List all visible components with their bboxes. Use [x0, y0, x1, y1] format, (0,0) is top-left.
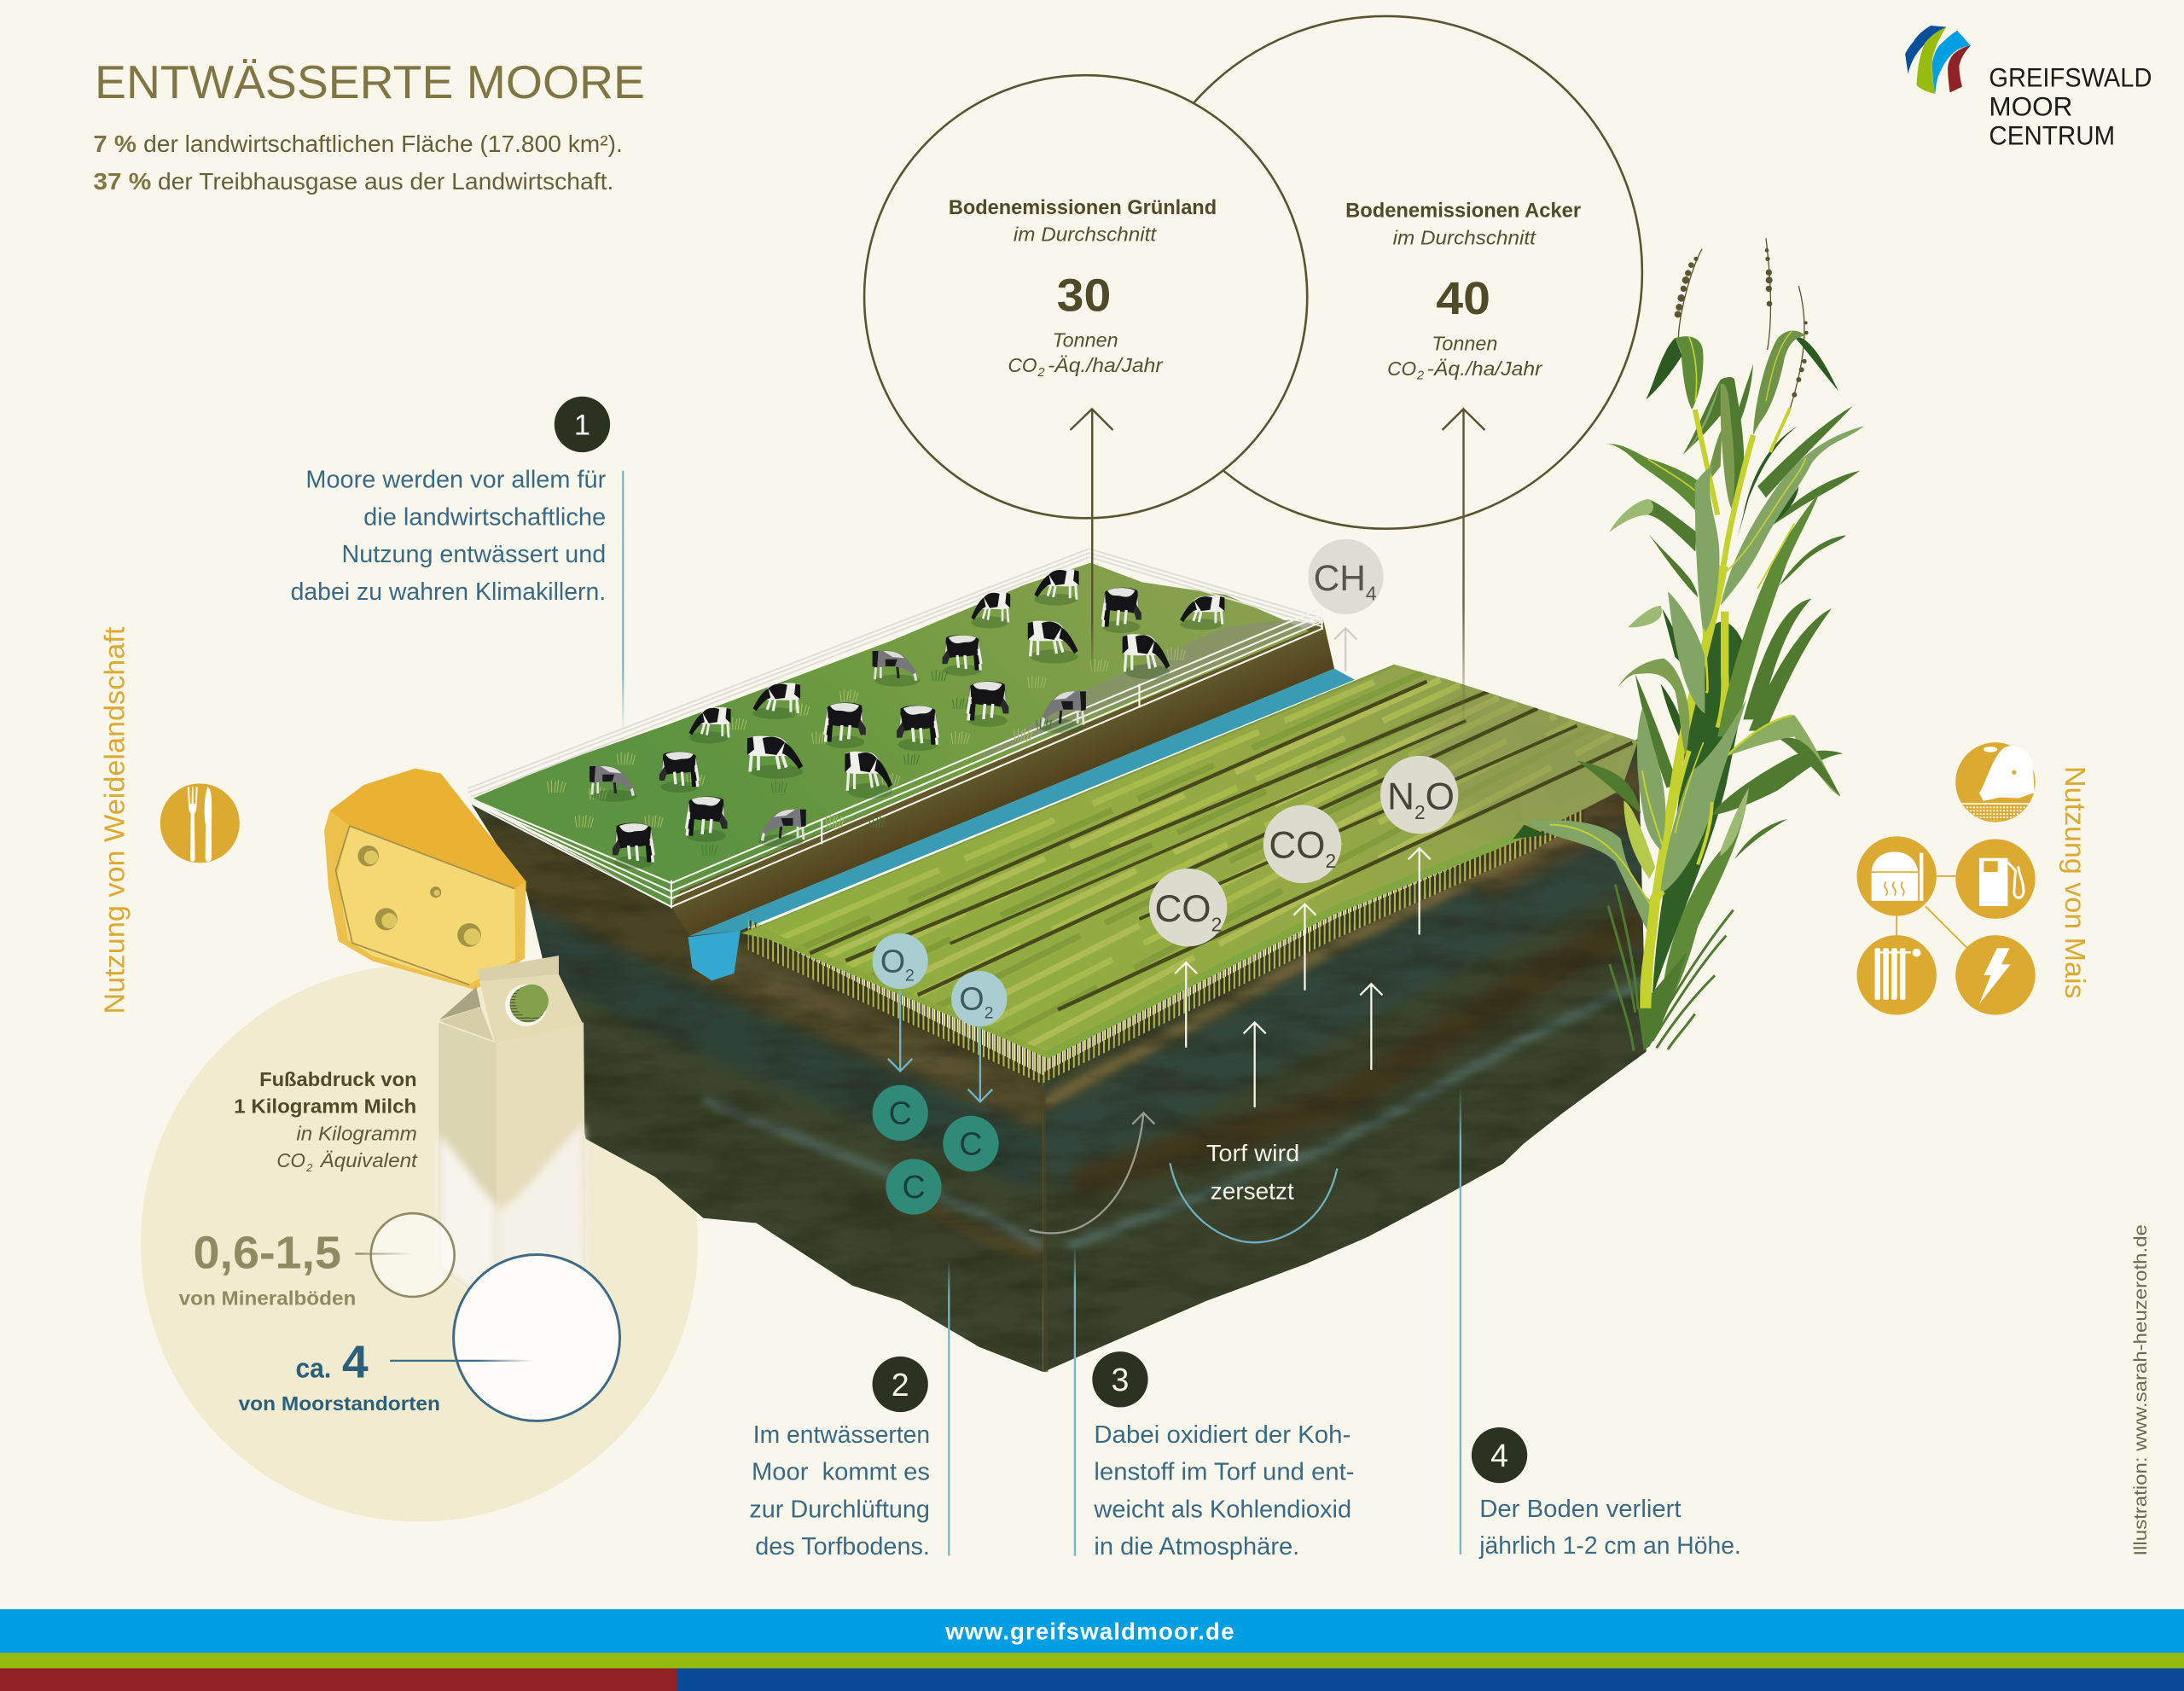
circle: Bodenemissionen Acker: im Durchschnitt: [1393, 227, 1537, 249]
circle: Bodenemissionen Grünland: 2: [1037, 366, 1044, 380]
lower leaves: [1618, 659, 1689, 757]
circle: Bodenemissionen Acker: Bodenemissionen Acker: [1345, 200, 1581, 223]
illustration: soil block: [460, 620, 1658, 1379]
icon: fuel pump: [1955, 839, 2036, 919]
step 1: die landwirtschaftliche: [363, 503, 606, 531]
intro text: [93, 131, 623, 195]
side label: Nutzung von Mais: Nutzung von Mais: [2059, 766, 2090, 999]
milk carton: [439, 956, 586, 1310]
value: mineral soils: 0,6-1,5: [194, 1227, 341, 1278]
step 2: 2: [892, 1367, 909, 1403]
gas: CO2: 2: [1325, 850, 1336, 872]
label: Torf wird zersetzt: Torf wird: [1206, 1140, 1299, 1166]
circle: Bodenemissionen Grünland: im Durchschnitt: [1014, 223, 1158, 245]
carbon particles: C: [902, 1169, 926, 1205]
gas: O2: [873, 933, 928, 1071]
step 1: 1: [574, 409, 590, 441]
seed heads: [1675, 238, 1809, 408]
circle: Bodenemissionen Grünland: CO: [1008, 354, 1037, 376]
main leaves: [1646, 338, 1682, 399]
illustration: crop field: [731, 654, 1651, 1084]
illustration: pasture: [468, 549, 1323, 908]
footprint circle background: [141, 965, 698, 1522]
cheese: [324, 769, 526, 990]
gas: CH4: CH: [1314, 558, 1366, 598]
step 2: [749, 1261, 950, 1560]
gas: CO2: [1263, 805, 1341, 883]
gas: O2: 2: [905, 966, 915, 985]
step 2: zur Durchlüftung: [749, 1496, 930, 1524]
step 3: weicht als Kohlendioxid: [1093, 1496, 1351, 1524]
step 4: 4: [1490, 1438, 1508, 1473]
step 1: Nutzung entwässert und: [341, 541, 606, 568]
footprint text: 1 Kilogramm Milch: [234, 1095, 416, 1117]
logo: Greifswald Moor Centrum: GREIFSWALD: [1989, 62, 2152, 93]
base with grass blades: [1638, 953, 1687, 1050]
icon: fork and knife: [160, 783, 240, 863]
footprint text: in Kilogramm: [296, 1123, 417, 1145]
icon: biogas plant: [1856, 836, 1937, 916]
value: mineral soils: [179, 1213, 455, 1310]
footer band: www.greifswaldmoor.de: [944, 1618, 1234, 1644]
carbon particles: [873, 1085, 999, 1215]
step 1: [291, 397, 624, 735]
value: peat sites: [239, 1255, 620, 1421]
circle: Bodenemissionen Grünland: -Äq./ha/Jahr: [1048, 354, 1164, 376]
circle: Bodenemissionen Acker: [1130, 16, 1642, 529]
gas: CO2: 2: [1211, 913, 1222, 935]
gas: N2O: N: [1387, 776, 1414, 818]
footprint text: 2: [305, 1161, 313, 1174]
footprint text: [234, 1068, 419, 1174]
circle: Bodenemissionen Acker: 40: [1436, 273, 1490, 324]
stem: [1647, 408, 1790, 1008]
circle: Bodenemissionen Grünland: [864, 75, 1307, 518]
side label: Nutzung von Weidelandschaft: Nutzung von Weidelandschaft: [99, 626, 131, 1014]
emission arrow: pasture: [1071, 409, 1112, 671]
label: Torf wird zersetzt: zersetzt: [1211, 1178, 1294, 1205]
icon: radiator: [1856, 935, 1937, 1015]
circle: Bodenemissionen Acker: -Äq./ha/Jahr: [1427, 357, 1543, 380]
intro text: 7 %: [93, 131, 136, 157]
step 1: dabei zu wahren Klimakillern.: [291, 578, 606, 606]
emission arrow: field: [1443, 409, 1484, 734]
step 1: Moore werden vor allem für: [305, 466, 607, 493]
step 3: lenstoff im Torf und ent-: [1094, 1458, 1355, 1485]
cows: [590, 569, 1224, 869]
gas: O2: [951, 971, 1007, 1101]
step 4: jährlich 1-2 cm an Höhe.: [1478, 1532, 1741, 1560]
logo: Greifswald Moor Centrum: CENTRUM: [1989, 119, 2115, 150]
footer band: [0, 1609, 2184, 1691]
step 3: 3: [1112, 1362, 1129, 1398]
circle: Bodenemissionen Grünland: 30: [1057, 270, 1111, 322]
gas: N2O: [1380, 756, 1458, 834]
intro text: 37 %: [93, 168, 151, 195]
intro text: der landwirtschaftlichen Fläche (17.800 km²).: [143, 131, 623, 157]
footprint text: CO: [276, 1149, 305, 1171]
gas: O2: O: [959, 981, 985, 1017]
icon connectors: [1896, 876, 1967, 948]
corn plant: [1513, 238, 1864, 1051]
icon: cattle feed: [1955, 742, 2036, 822]
step 3: in die Atmosphäre.: [1094, 1533, 1299, 1560]
illustration credit: Illustration: www.sarah-heuzeroth.de: [2131, 1224, 2151, 1556]
front leaves: [1721, 426, 1864, 606]
step 2: Moor kommt es: [752, 1458, 930, 1485]
title: ENTWÄSSERTE MOORE: [95, 55, 645, 108]
arrows: gases rising: [1175, 848, 1431, 1107]
step 2: des Torfbodens.: [755, 1533, 930, 1560]
circle: Bodenemissionen Grünland: Tonnen: [1052, 329, 1118, 352]
value: peat sites: ca.: [295, 1352, 331, 1384]
footprint text: Äquivalent: [319, 1149, 419, 1171]
carbon particles: C: [889, 1095, 912, 1131]
step 3: Dabei oxidiert der Koh-: [1094, 1421, 1350, 1449]
value: mineral soils: von Mineralböden: [179, 1287, 356, 1310]
step 4: [1460, 1086, 1741, 1560]
gas: CH4: 4: [1366, 583, 1377, 605]
logo: Greifswald Moor Centrum: [1905, 26, 2152, 150]
step 3: [1074, 1246, 1355, 1560]
gas: O2: 2: [985, 1003, 994, 1022]
value: peat sites: 4: [342, 1337, 369, 1388]
gas: CO2: CO: [1154, 888, 1211, 930]
gas: O2: O: [880, 944, 905, 979]
value: peat sites: von Moorstandorten: [239, 1392, 440, 1415]
circle: Bodenemissionen Acker: Tonnen: [1432, 332, 1497, 354]
gas: CO2: [1149, 869, 1227, 946]
icon: lightning: [1955, 935, 2036, 1015]
gas: CO2: CO: [1269, 825, 1325, 867]
circle: Bodenemissionen Acker: 2: [1416, 369, 1424, 383]
gas: N2O: 2: [1414, 801, 1426, 823]
circle: Bodenemissionen Grünland: Bodenemissionen Grünland: [949, 197, 1217, 219]
circle: Bodenemissionen Acker: CO: [1387, 357, 1416, 380]
step 2: Im entwässerten: [753, 1421, 930, 1449]
back leaves: [1653, 622, 1745, 998]
footprint text: Fußabdruck von: [259, 1068, 417, 1090]
intro text: der Treibhausgase aus der Landwirtschaft.: [158, 168, 613, 195]
step 4: Der Boden verliert: [1479, 1496, 1682, 1523]
carbon particles: C: [959, 1125, 983, 1161]
curved arrow: decomposition: [1030, 1113, 1154, 1233]
gas: N2O: O: [1426, 776, 1455, 818]
gas: CH4: [1308, 539, 1384, 671]
label: Torf wird zersetzt: [1170, 1140, 1337, 1242]
logo: Greifswald Moor Centrum: MOOR: [1989, 91, 2072, 122]
illustration: drainage canal: [688, 669, 1355, 980]
